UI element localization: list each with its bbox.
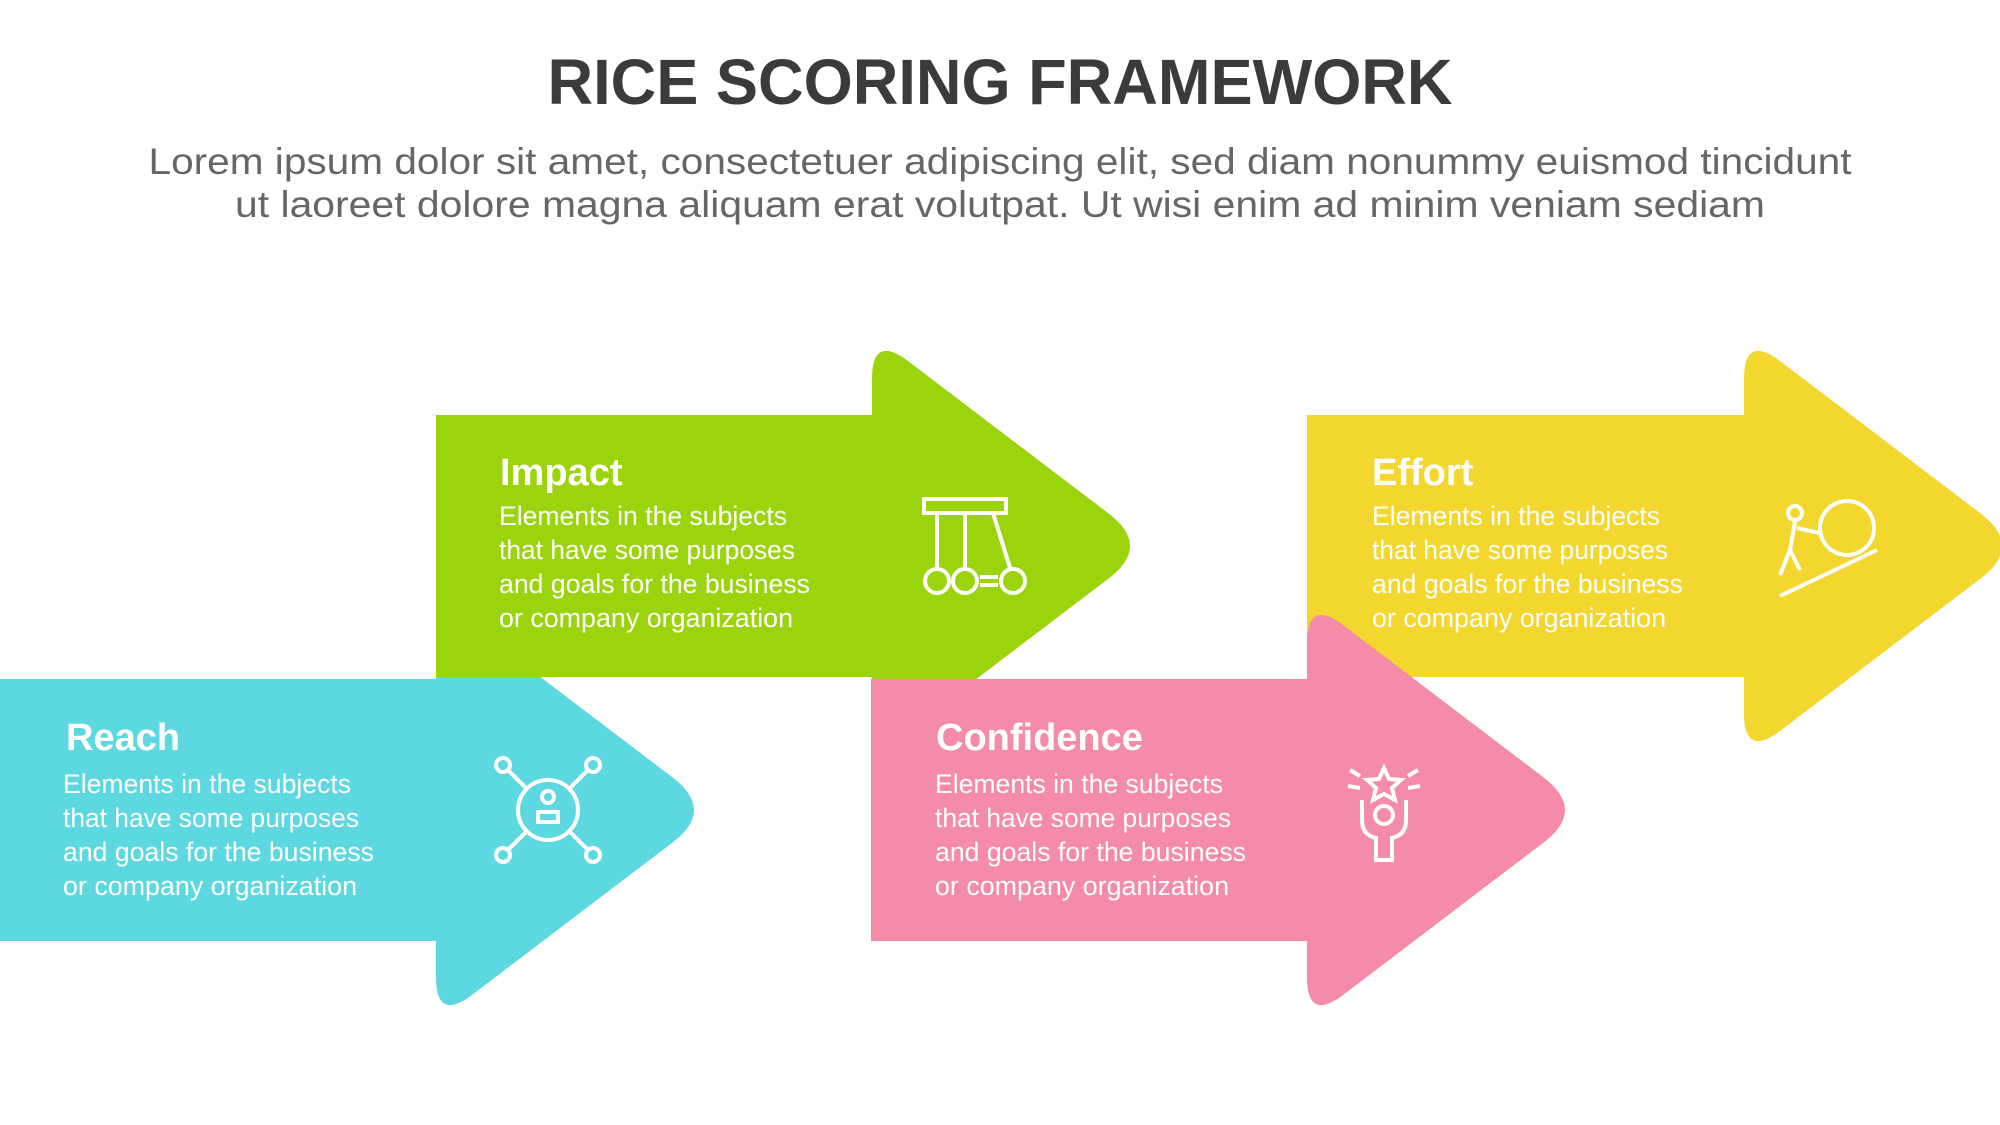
- title: RICE SCORING FRAMEWORK: [548, 46, 1452, 118]
- text: effort body: or company organization: [1372, 603, 1666, 633]
- subtitle: ut laoreet dolore magna aliquam erat volutpat. Ut wisi enim ad minim veniam sediam: [235, 184, 1765, 225]
- text: effort body: that have some purposes: [1372, 535, 1668, 565]
- text: confidence body: Elements in the subjects: [935, 769, 1223, 799]
- text: reach body: Elements in the subjects: [63, 769, 351, 799]
- icon: pushing boulder: [1780, 501, 1877, 596]
- heading: reach: Reach: [66, 717, 180, 759]
- text: confidence body: and goals for the business: [935, 837, 1246, 867]
- panel: impact arrow: [436, 351, 1130, 741]
- subtitle: [148, 141, 1852, 225]
- text: confidence body: that have some purposes: [935, 803, 1231, 833]
- text: confidence body: or company organization: [935, 871, 1229, 901]
- text: effort body: Elements in the subjects: [1372, 501, 1660, 531]
- heading: impact: Impact: [500, 452, 623, 494]
- text: impact body: [499, 501, 810, 633]
- text: confidence body: [935, 769, 1246, 901]
- text: reach body: and goals for the business: [63, 837, 374, 867]
- text: effort body: and goals for the business: [1372, 569, 1683, 599]
- text: impact body: and goals for the business: [499, 569, 810, 599]
- panel: confidence arrow: [871, 615, 1565, 1005]
- panel: reach arrow: [0, 615, 694, 1005]
- panel: effort arrow: [1307, 351, 2000, 741]
- icon: star achiever: [1348, 768, 1420, 860]
- text: reach body: [63, 769, 374, 901]
- icon: network: [496, 758, 600, 862]
- text: impact body: or company organization: [499, 603, 793, 633]
- icon: newton cradle: [924, 499, 1025, 593]
- heading: effort: Effort: [1372, 452, 1474, 494]
- text: impact body: that have some purposes: [499, 535, 795, 565]
- text: reach body: or company organization: [63, 871, 357, 901]
- heading: confidence: Confidence: [936, 717, 1143, 759]
- subtitle: Lorem ipsum dolor sit amet, consectetuer adipiscing elit, sed diam nonummy euismod tincidunt: [148, 141, 1852, 182]
- text: impact body: Elements in the subjects: [499, 501, 787, 531]
- text: effort body: [1372, 501, 1683, 633]
- text: reach body: that have some purposes: [63, 803, 359, 833]
